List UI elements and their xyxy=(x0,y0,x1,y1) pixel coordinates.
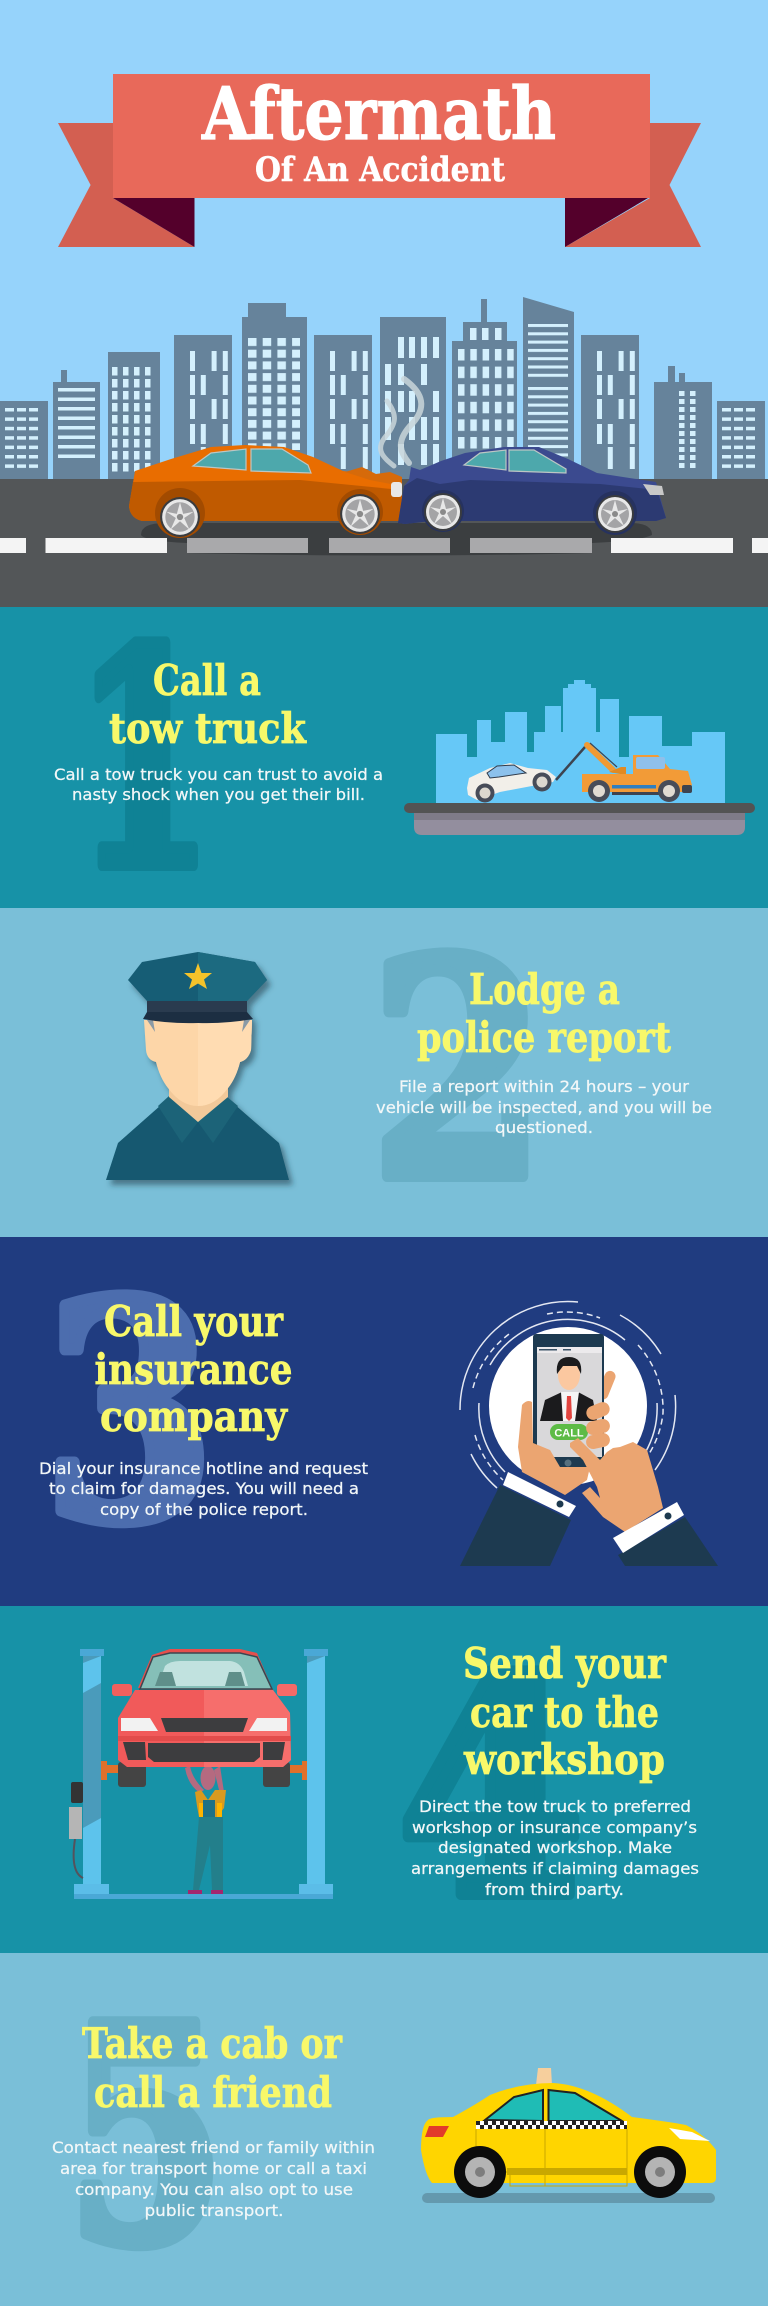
title: Aftermath: Aftermath xyxy=(201,71,556,156)
heading xyxy=(417,965,671,1062)
body text xyxy=(54,765,383,804)
illustration: yellow taxi xyxy=(421,2068,716,2203)
heading: police report xyxy=(417,1013,671,1062)
body text: vehicle will be inspected, and you will be xyxy=(376,1098,712,1117)
heading xyxy=(94,1297,292,1441)
panel: hero header xyxy=(0,0,768,607)
towed white car xyxy=(467,763,556,802)
right sleeve xyxy=(613,1502,718,1566)
body text: area for transport home or call a taxi xyxy=(60,2159,367,2178)
body text: company. You can also opt to use xyxy=(75,2180,353,2199)
heading: Call your xyxy=(104,1297,284,1346)
number 2: 2 xyxy=(370,894,546,1247)
heading: Call a xyxy=(153,656,261,705)
heading xyxy=(109,656,307,753)
city skyline xyxy=(0,297,765,479)
red car front xyxy=(112,1649,297,1787)
heading: car to the xyxy=(470,1688,659,1737)
operator xyxy=(540,1357,597,1421)
heading: Take a cab or xyxy=(82,2019,343,2068)
heading: workshop xyxy=(463,1735,665,1784)
illustration: tow truck and city xyxy=(404,680,755,835)
orange car xyxy=(129,445,402,538)
illustration: car on lift xyxy=(69,1649,333,1899)
body text: questioned. xyxy=(495,1118,593,1137)
body text xyxy=(376,1077,712,1137)
left hand xyxy=(518,1400,612,1495)
heading: call a friend xyxy=(94,2068,332,2117)
lift frame xyxy=(69,1649,333,1899)
ribbon tails xyxy=(58,123,701,247)
panel: step 1 call a tow truck xyxy=(0,583,768,936)
body text: arrangements if claiming damages xyxy=(411,1859,699,1878)
body text: to claim for damages. You will need a xyxy=(49,1479,359,1498)
number 3: 3 xyxy=(43,1236,215,1589)
heading: Lodge a xyxy=(469,965,620,1014)
body text: nasty shock when you get their bill. xyxy=(72,785,365,804)
body text: public transport. xyxy=(144,2201,284,2220)
smoke xyxy=(381,379,421,466)
heading: company xyxy=(100,1392,288,1441)
body text xyxy=(411,1797,699,1899)
number 4: 4 xyxy=(397,1612,585,1965)
tow truck xyxy=(582,743,692,802)
road xyxy=(0,479,768,607)
mechanic xyxy=(185,1766,226,1894)
subtitle: Of An Accident xyxy=(255,150,505,190)
panel: step 2 lodge a police report xyxy=(0,894,768,1247)
number 1: 1 xyxy=(74,583,214,936)
phone xyxy=(533,1334,604,1469)
panel: step 3 call your insurance company xyxy=(0,1236,768,1606)
heading: Send your xyxy=(463,1639,667,1688)
body text: from third party. xyxy=(485,1880,624,1899)
navy car xyxy=(398,447,666,535)
body text: Call a tow truck you can trust to avoid a xyxy=(54,765,383,784)
right hand xyxy=(570,1438,663,1532)
body text: designated workshop. Make xyxy=(438,1838,672,1857)
body text xyxy=(52,2138,375,2220)
panel: step 5 take a cab or call a friend xyxy=(0,1953,768,2306)
number 5: 5 xyxy=(66,1959,226,2306)
call button: CALL xyxy=(554,1428,584,1440)
body text: copy of the police report. xyxy=(100,1500,308,1519)
illustration: phone call xyxy=(460,1302,718,1566)
body text xyxy=(39,1459,368,1519)
title ribbon xyxy=(58,71,701,247)
illustration: police officer xyxy=(106,952,289,1180)
heading: tow truck xyxy=(109,704,307,753)
body text: Dial your insurance hotline and request xyxy=(39,1459,368,1478)
cap star xyxy=(184,963,212,989)
signal rings xyxy=(460,1302,676,1488)
heading: insurance xyxy=(94,1345,292,1394)
body text: File a report within 24 hours – your xyxy=(399,1077,689,1096)
body text: Direct the tow truck to preferred xyxy=(419,1797,691,1816)
panel: step 4 send your car to the workshop xyxy=(0,1606,768,1965)
police cap xyxy=(128,952,267,1023)
heading xyxy=(82,2019,343,2117)
body text: workshop or insurance company’s xyxy=(412,1818,697,1837)
heading xyxy=(463,1639,667,1784)
crane cable xyxy=(556,747,585,780)
left sleeve xyxy=(460,1472,576,1566)
body text: Contact nearest friend or family within xyxy=(52,2138,375,2157)
